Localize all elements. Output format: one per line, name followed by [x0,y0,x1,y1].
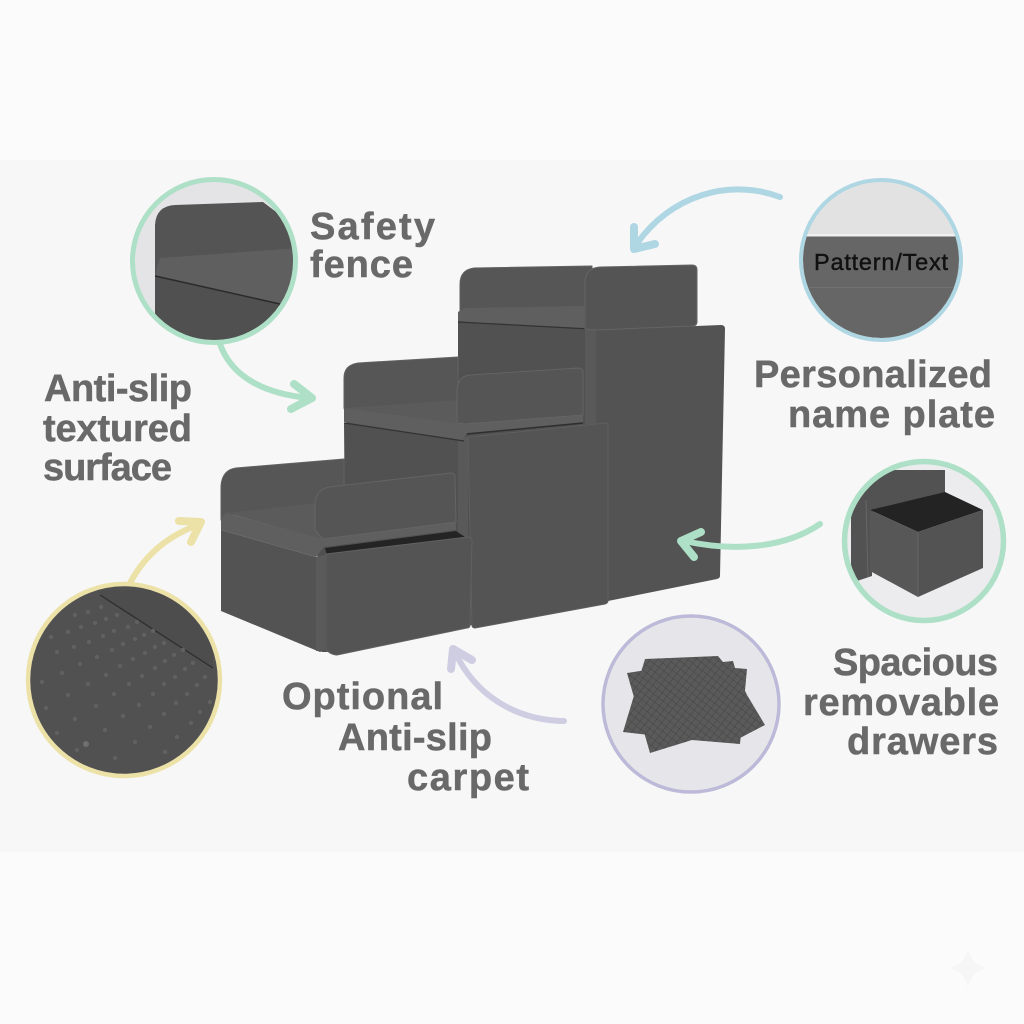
callout: anti-slip carpet [282,616,779,799]
label: anti-slip textured surface: textured [43,408,192,450]
top step front fence [585,265,697,330]
arrow: safety fence to stairs [220,344,312,409]
middle tall block [468,423,608,628]
middle step riser [344,423,468,537]
top step seat [458,306,584,328]
detail circle: dotted texture [28,584,220,776]
silhouette underlay [316,325,608,652]
label: anti-slip textured surface: surface [43,447,172,489]
label: personalized name plate: name plate [788,394,995,436]
arrow: surface to stairs [130,521,201,583]
drawer opening shadow [325,531,465,556]
label: personalized name plate [754,354,995,436]
label: anti-slip textured surface: Anti-slip [44,368,192,410]
top step riser [458,318,595,424]
middle step lip [344,408,583,440]
label: optional anti-slip carpet: carpet [407,757,529,799]
middle step front fence [457,368,583,424]
arrow: drawers to stairs [681,524,820,557]
texture dots [40,605,212,760]
arrow: name plate to stairs [634,189,780,249]
lower step front fence [315,473,456,539]
callout: name plate [634,180,995,436]
lower step body [221,530,325,652]
label: optional anti-slip carpet: Anti-slip [338,717,492,759]
sparkle watermark [948,948,988,988]
label: anti-slip textured surface [43,368,192,489]
lower step back fence [221,459,344,520]
plate text: Pattern/Text [814,249,948,275]
detail circle: name plate [799,178,963,342]
lower step lip [221,513,456,557]
label: optional anti-slip carpet: Optional [282,676,443,718]
label: safety fence: Safety [310,206,435,248]
carpet sheets [623,656,765,753]
lower step seat [226,503,325,540]
label: optional anti-slip carpet [282,676,529,799]
label: safety fence: fence [310,244,413,286]
pull-out drawer front [326,537,472,655]
middle step back fence [344,357,458,412]
callout: anti-slip textured surface [28,368,220,776]
detail circle: drawer [844,462,1004,620]
product: stepped pet stairs with drawers [221,265,725,655]
callout: safety fence [132,180,435,409]
label: spacious removable drawers: removable [803,682,999,724]
arrow: carpet to stairs [451,649,564,721]
detail circle: carpet sheets [603,616,779,792]
callout: removable drawers [681,462,1004,763]
label: safety fence [310,206,435,286]
top step back fence [460,266,592,325]
detail circle: safety fence [132,180,300,360]
label: spacious removable drawers: drawers [847,721,998,763]
label: personalized name plate: Personalized [754,354,992,396]
tall right column [596,325,725,601]
label: spacious removable drawers [803,642,999,763]
middle step seat [345,372,583,424]
label: spacious removable drawers: Spacious [833,642,998,684]
